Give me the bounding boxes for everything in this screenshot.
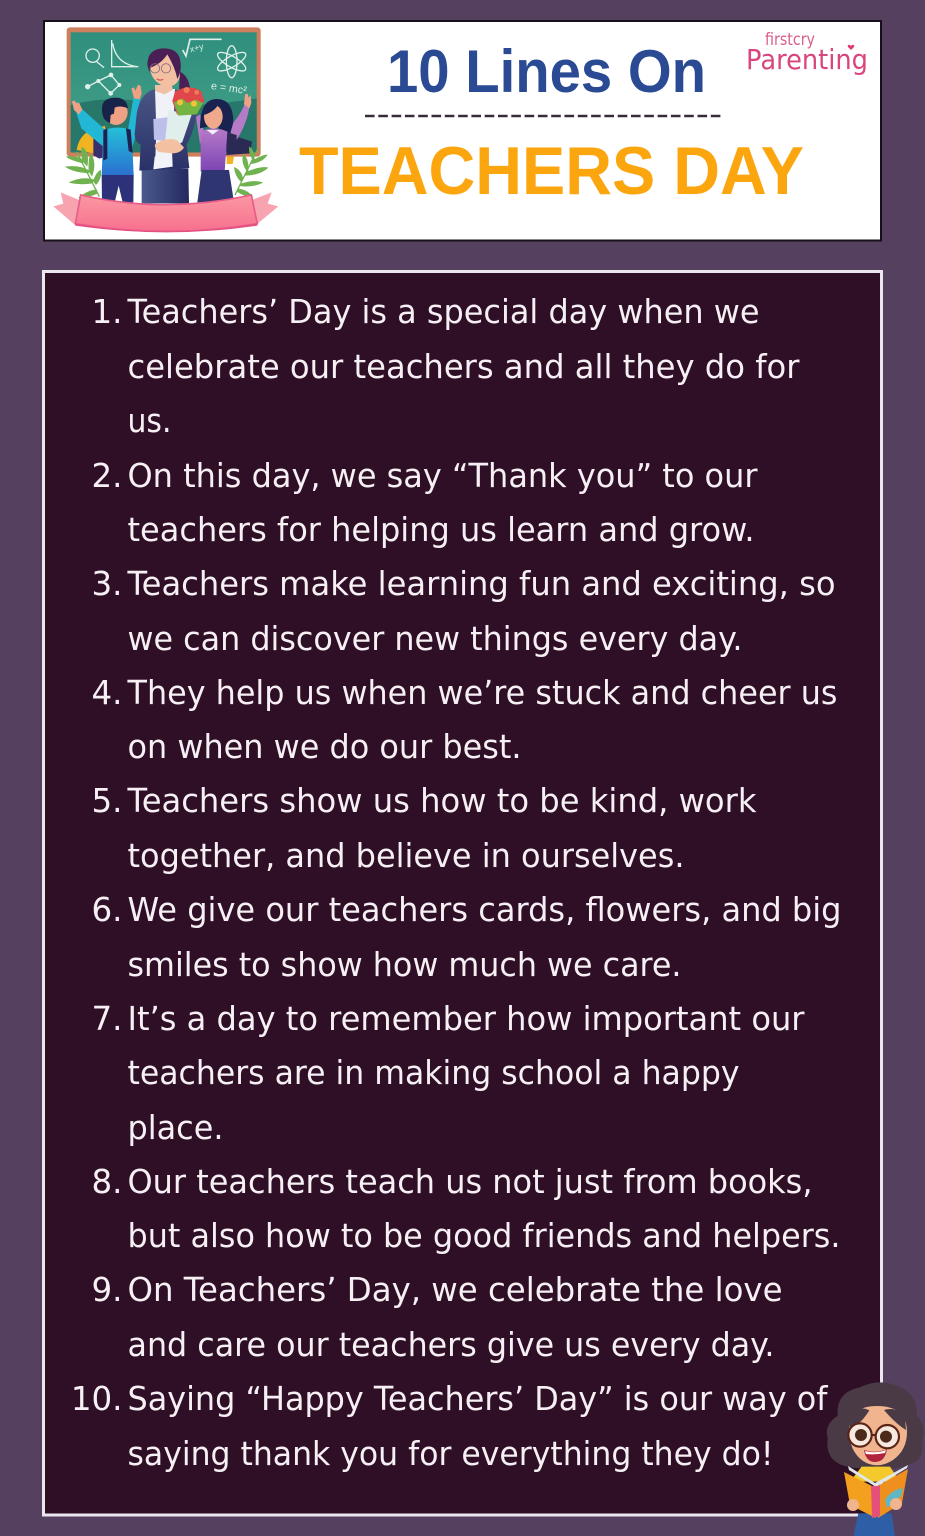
line 8 (91, 1163, 840, 1255)
teacher (135, 48, 204, 203)
yellow backpack (77, 126, 108, 156)
chalkboard: e = mc² (210, 80, 248, 97)
illustration: teacher with two students at a chalkboard (53, 27, 278, 232)
banner panel (44, 21, 881, 240)
chalkboard (67, 27, 261, 157)
line 9: On Teachers’ Day, we celebrate the love (128, 1271, 782, 1309)
line 8: but also how to be good friends and helpers. (128, 1217, 840, 1255)
hair (827, 1382, 924, 1470)
mouth (864, 1449, 887, 1462)
line 8: 8. (91, 1163, 122, 1201)
leaves (65, 146, 268, 198)
line 1: Teachers’ Day is a special day when we (127, 293, 760, 331)
line 6: We give our teachers cards, flowers, and big (128, 891, 842, 929)
title line: 10 Lines On: 10 Lines On (387, 38, 706, 105)
line 9 (91, 1271, 782, 1364)
open book (844, 1465, 908, 1518)
line 6: 6. (91, 891, 122, 929)
line 3: we can discover new things every day. (128, 620, 742, 658)
line 5: together, and believe in ourselves. (128, 837, 684, 875)
glasses (848, 1423, 899, 1448)
line 2: teachers for helping us learn and grow. (128, 511, 754, 549)
face (849, 1406, 907, 1465)
line 7 (91, 1000, 805, 1147)
line 3: 3. (91, 565, 122, 603)
FirstCry Parenting logo: Parenting (746, 43, 868, 76)
line 10 (71, 1380, 829, 1473)
list panel (44, 272, 882, 1515)
pink ribbon banner (53, 192, 278, 232)
line 7: place. (128, 1109, 224, 1147)
line 4: on when we do our best. (128, 728, 522, 766)
line 7: teachers are in making school a happy (128, 1054, 740, 1092)
line 4 (91, 674, 838, 766)
line 2: 2. (91, 457, 122, 495)
line 2 (91, 457, 758, 549)
line 1: 1. (91, 293, 122, 331)
title line: Teachers Day: TEACHERS DAY (299, 133, 804, 209)
line 5: 5. (91, 782, 122, 820)
line 10: Saying “Happy Teachers’ Day” is our way of (128, 1380, 829, 1418)
line 3 (91, 565, 836, 658)
dashed divider (365, 115, 723, 117)
line 2: On this day, we say “Thank you” to our (128, 457, 758, 495)
line 6: smiles to show how much we care. (128, 946, 682, 984)
boy student (72, 85, 142, 202)
collar (850, 1467, 900, 1482)
girl student (196, 94, 251, 202)
line 10: saying thank you for everything they do! (128, 1435, 774, 1473)
line 1 (91, 293, 800, 440)
line 5: Teachers show us how to be kind, work (127, 782, 757, 820)
line 1: celebrate our teachers and all they do for (128, 348, 800, 386)
line 9: 9. (91, 1271, 122, 1309)
line 5 (91, 782, 757, 875)
chalkboard: x+y (189, 41, 205, 54)
line 9: and care our teachers give us every day. (128, 1326, 774, 1364)
FirstCry Parenting logo: firstcry (765, 30, 815, 50)
header banner (44, 21, 881, 240)
line 6 (91, 891, 842, 984)
line 1: us. (128, 402, 172, 440)
panel background (44, 272, 882, 1515)
line 7: 7. (91, 1000, 122, 1038)
line 3: Teachers make learning fun and exciting, so (127, 565, 835, 603)
dress (853, 1513, 895, 1536)
FirstCry Parenting logo (746, 30, 868, 76)
line 8: Our teachers teach us not just from books, (128, 1163, 812, 1201)
line 4: 4. (91, 674, 122, 712)
line 4: They help us when we’re stuck and cheer us (127, 674, 838, 712)
mascot: girl with glasses reading a book (827, 1382, 924, 1536)
line 7: It’s a day to remember how important our (128, 1000, 805, 1038)
line 10: 10. (71, 1380, 122, 1418)
